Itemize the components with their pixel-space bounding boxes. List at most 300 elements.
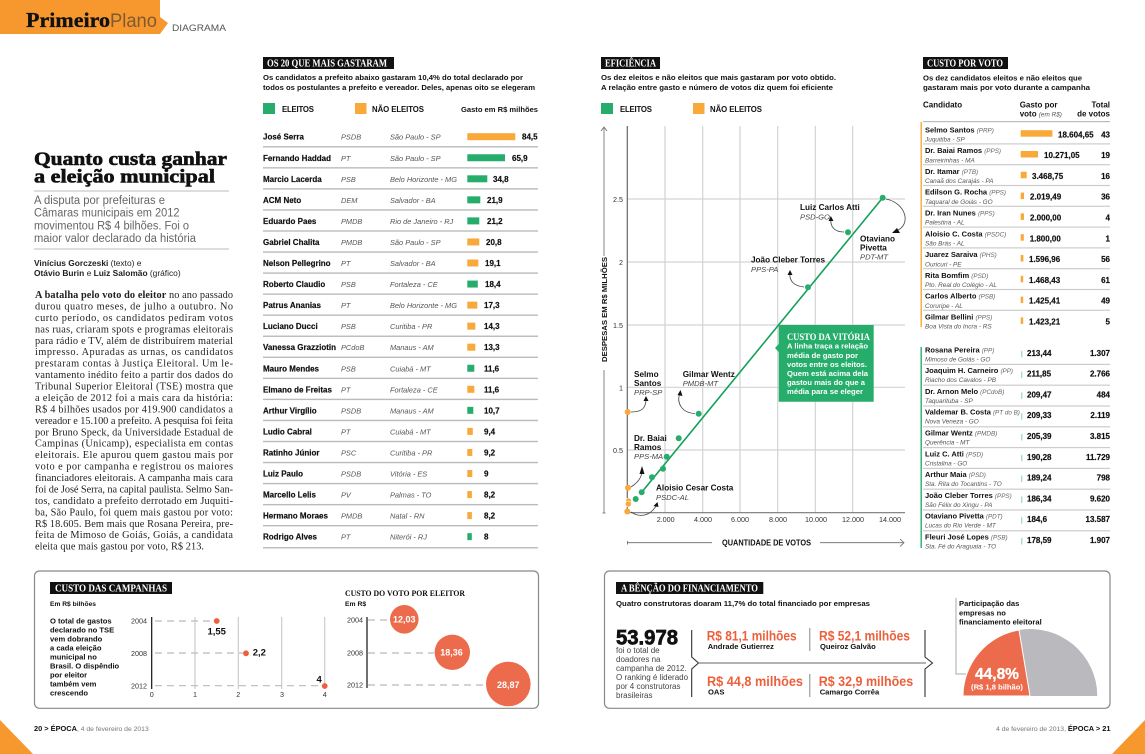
- row: Gilmar Wentz: 3.815: [1090, 432, 1111, 441]
- title: [34, 150, 227, 188]
- deck text: movimentou R$ 4 bilhões. Foi o: [34, 220, 189, 232]
- article body text: por Bruno Speck, da Universidade Estadual de: [35, 427, 233, 438]
- chart: custo do voto por eleitor: 2004: [347, 616, 363, 624]
- chart: total campaign cost: 4: [316, 674, 322, 686]
- row: Fleuri José Lopes: Fleuri José Lopes (PSB): [925, 532, 1008, 542]
- annotation: Luiz Carlos Atti: PSD-GO: [800, 212, 830, 222]
- row: Ratinho Júnior: Curitiba - PR: [390, 448, 433, 457]
- row: Otaviano Pivetta: 13.587: [1086, 515, 1111, 524]
- company: Andrade Gutierrez: R$ 81,1 milhões: [707, 628, 797, 644]
- stat: donors: campanha de 2012.: [616, 664, 687, 673]
- chart: total campaign cost: 1,55: [207, 626, 227, 638]
- annotation: Gilmar Wentz: [678, 370, 735, 414]
- row: Fleuri José Lopes: 1.907: [1090, 536, 1111, 545]
- article body text: eleita que mais gastou por voto, R$ 213.: [35, 542, 204, 553]
- row: Juarez Saraiva: Juarez Saraiva (PHS): [925, 250, 997, 259]
- x axis labels: 6.000: [731, 515, 749, 524]
- row: Nelson Pellegrino: PT: [341, 259, 351, 268]
- scatter chart: [600, 126, 905, 548]
- chart: custo do voto por eleitor: CUSTO DO VOTO POR ELEITOR: [345, 588, 466, 598]
- annotation: Luiz Carlos Atti: [800, 203, 860, 232]
- authors byline: [34, 258, 181, 278]
- article body text: R$ 4 bilhões usados por 419.900 candidatos a: [35, 404, 233, 415]
- row: Dr. Baiai Ramos: 10.271,05: [1044, 151, 1080, 160]
- row: Carlos Alberto: Carlos Alberto (PSB): [925, 292, 995, 301]
- chart: custo do voto por eleitor: Em R$: [345, 601, 366, 608]
- row: Gilmar Wentz: 205,39: [1027, 432, 1052, 441]
- intro text: Os dez eleitos e não eleitos que mais gastaram por voto obtido.: [601, 73, 836, 82]
- row: Nelson Pellegrino: [263, 259, 538, 274]
- row: Gabriel Chalita: 20,8: [486, 238, 502, 247]
- footer right with orange corner: [996, 720, 1145, 754]
- authors byline: Otávio Burin e Luiz Salomão (gráfico): [34, 268, 181, 278]
- group: non-elected table: [920, 122, 1111, 331]
- row: Dr. Arnon Melo: [923, 387, 1111, 407]
- row: Carlos Alberto: [923, 292, 1111, 311]
- row: Luiz Paulo: PSDB: [341, 470, 361, 478]
- label: participação das empresas: financiamento eleitoral: [959, 618, 1042, 626]
- intro text: [263, 73, 535, 92]
- row: Dr. Iran Nunes: Dr. Iran Nunes (PPS): [925, 208, 995, 218]
- row: Arthur Virgílio: 10,7: [484, 406, 500, 415]
- callout: custo da vitória: votos entre os eleitos.: [787, 360, 867, 369]
- row: Eduardo Paes: Eduardo Paes: [263, 217, 317, 226]
- chart: custo do voto por eleitor: [345, 588, 531, 706]
- bracket connector: [692, 630, 698, 697]
- explanatory text: [50, 616, 120, 698]
- row: Selmo Santos: Selmo Santos (PRP): [925, 125, 994, 134]
- title: Quanto custa ganhar: [34, 150, 227, 170]
- row: Gilmar Wentz: [923, 428, 1111, 448]
- row: Roberto Claudio: PSB: [341, 280, 356, 289]
- row: Arthur Virgílio: Arthur Virgílio: [263, 406, 317, 415]
- annotation: Dr. Baiai Ramos: PPS-MA: [634, 452, 663, 461]
- row: Elmano de Freitas: 11,6: [484, 385, 500, 394]
- row: Mauro Mendes: PSB: [341, 364, 356, 373]
- chart: total campaign cost: 0: [150, 690, 154, 699]
- row: ACM Neto: 21,9: [487, 196, 503, 205]
- article body text: Tribunal Superior Eleitoral (TSE) mostra que: [35, 382, 233, 392]
- intro text: [601, 73, 836, 92]
- row: Rodrigo Alves: [263, 533, 538, 548]
- annotation: Otaviano Pivetta: [860, 199, 905, 262]
- annotation: Dr. Baiai Ramos: [631, 434, 667, 487]
- article body text: curto período, os candidatos pediram votos: [35, 313, 233, 324]
- row: Rosana Pereira: Rosana Pereira (PP): [925, 345, 994, 354]
- deck text: Câmaras municipais em 2012: [34, 208, 180, 220]
- row: Eduardo Paes: Rio de Janeiro - RJ: [390, 217, 454, 226]
- row: Ludio Cabral: [263, 427, 538, 442]
- row: Nelson Pellegrino: Nelson Pellegrino: [263, 259, 331, 268]
- chart: total campaign cost: 2: [236, 690, 240, 699]
- row: Edilson G. Rocha: Taquaral de Goiás - GO: [925, 199, 993, 206]
- row: Rodrigo Alves: Niterói - RJ: [390, 533, 427, 542]
- row: Elmano de Freitas: Elmano de Freitas: [263, 385, 332, 394]
- row: Patrus Ananias: [263, 301, 538, 316]
- label: participação das empresas: Participação das: [959, 599, 1019, 608]
- row: ACM Neto: DEM: [341, 196, 358, 205]
- explanatory text: Brasil. O dispêndio: [50, 662, 120, 670]
- row: Mauro Mendes: Mauro Mendes: [263, 364, 320, 373]
- chart: custo do voto por eleitor: 12,03: [393, 614, 416, 624]
- deck text: [34, 190, 229, 250]
- row: Eduardo Paes: PMDB: [341, 217, 362, 226]
- x axis labels: 4.000: [694, 515, 712, 524]
- row: Rita Bomfim: [923, 271, 1111, 290]
- row: Patrus Ananias: 17,3: [484, 301, 500, 310]
- row: Roberto Claudio: 18,4: [485, 280, 501, 289]
- chart: total campaign cost: 2,2: [253, 648, 266, 658]
- row: Aloisio C. Costa: [923, 229, 1111, 248]
- row: ACM Neto: Salvador - BA: [390, 196, 436, 205]
- annotation: João Cleber Torres: [751, 256, 825, 287]
- article body text: vantamento inédito feito a partir dos dados do: [35, 370, 233, 381]
- legend: NÃO ELEITOS: [372, 105, 424, 114]
- row: Juarez Saraiva: [923, 250, 1111, 269]
- x axis labels: 12.000: [842, 515, 864, 524]
- row: Rosana Pereira: 1.307: [1090, 349, 1111, 358]
- row: João Cleber Torres: São Félix do Xingu - PA: [925, 502, 992, 509]
- chart: total campaign cost: 2008: [131, 649, 147, 658]
- annotation: Gilmar Wentz: Gilmar Wentz: [683, 370, 735, 379]
- row: Selmo Santos: 43: [1101, 130, 1111, 139]
- column headers: de votos: [1077, 110, 1111, 118]
- row: Roberto Claudio: Roberto Claudio: [263, 280, 325, 289]
- article body text: financiadores eleitorais. A campanha mais cara: [35, 473, 233, 484]
- stat: donors: [616, 626, 689, 700]
- row: Dr. Arnon Melo: Taquarituba - SP: [925, 398, 973, 405]
- explanatory text: a cada eleição: [50, 644, 102, 652]
- row: Aloisio C. Costa: 1.800,00: [1030, 234, 1061, 243]
- chart: custo do voto por eleitor: 2012: [347, 680, 363, 690]
- row: João Cleber Torres: [923, 491, 1111, 511]
- article body text: nas ruas, criaram spots e programas eleitorais: [35, 324, 233, 335]
- row: Eduardo Paes: [263, 217, 538, 232]
- row: Carlos Alberto: 49: [1101, 297, 1111, 306]
- row: Luiz C. Atti: Luiz C. Atti (PSD): [925, 449, 983, 458]
- row: Ludio Cabral: 9,4: [484, 427, 496, 436]
- legend: [263, 103, 538, 114]
- heading tag: CUSTO DAS CAMPANHAS: [55, 584, 167, 594]
- row: Dr. Baiai Ramos: [923, 146, 1111, 165]
- row: Ludio Cabral: PT: [341, 427, 351, 436]
- y axis labels: 1.5: [613, 321, 623, 330]
- chart: custo do voto por eleitor: 28,87: [497, 680, 520, 690]
- intro text: Quatro construtoras doaram 11,7% do total financiado por empresas: [616, 599, 870, 608]
- row: José Serra: [263, 133, 538, 148]
- row: Gilmar Bellini: [925, 312, 1111, 331]
- row: Roberto Claudio: Fortaleza - CE: [390, 280, 438, 289]
- annotation: Selmo Santos: [631, 370, 663, 412]
- row: Fernando Haddad: 65,9: [512, 154, 528, 163]
- annotation: João Cleber Torres: PPS-PA: [751, 265, 778, 274]
- row: João Cleber Torres: 186,34: [1027, 494, 1052, 503]
- row: Gilmar Bellini: Gilmar Bellini (PPS): [925, 312, 992, 322]
- legend: ELEITOS: [620, 105, 652, 114]
- company: Andrade Gutierrez: [707, 628, 797, 651]
- y axis labels: 2: [619, 258, 623, 267]
- explanatory text: vem dobrando: [50, 634, 103, 644]
- elected points: [633, 195, 886, 502]
- article body text: [35, 290, 234, 553]
- row: Rosana Pereira: [923, 345, 1111, 365]
- x axis labels: 2.000: [657, 515, 675, 524]
- article body text: impresso. Apuradas as urnas, os candidatos: [35, 347, 233, 358]
- heading tag: CUSTO POR VOTO: [927, 58, 1003, 70]
- row: Dr. Itamar: 16: [1101, 172, 1111, 181]
- column headers: Gasto por: [1020, 100, 1057, 110]
- row: Vanessa Grazziotin: [263, 343, 538, 358]
- row: Dr. Iran Nunes: 2.000,00: [1030, 214, 1062, 222]
- heading tag: EFICIÊNCIA: [605, 58, 657, 70]
- footer right with orange corner: 4 de fevereiro de 2013, ÉPOCA > 21: [996, 724, 1110, 733]
- x axis labels: [657, 515, 901, 524]
- row: Dr. Itamar: 3.468,75: [1032, 172, 1064, 181]
- annotation: Selmo Santos: Selmo: [634, 370, 659, 379]
- callout: custo da vitória: média de gasto por: [787, 351, 858, 360]
- row: Dr. Arnon Melo: 209,47: [1027, 390, 1052, 399]
- intro text: Os candidatos a prefeito abaixo gastaram 10,4% do total declarado por: [263, 73, 523, 82]
- row: Otaviano Pivetta: [923, 512, 1111, 531]
- row: Joaquim H. Carneiro: [923, 366, 1111, 386]
- intro text: todos os postulantes a prefeito e vereador. Deles, apenas oito se elegeram: [263, 83, 535, 92]
- row: Patrus Ananias: Belo Horizonte - MG: [390, 301, 457, 310]
- callout: custo da vitória: Quem está acima dela: [787, 369, 869, 378]
- article body text: prestaram contas à Justiça Eleitoral. Um le-: [35, 359, 234, 370]
- row: Rita Bomfim: 1.468,43: [1029, 276, 1061, 285]
- row: Rita Bomfim: Pto. Real do Colégio - AL: [925, 282, 997, 289]
- row: Vanessa Grazziotin: Manaus - AM: [390, 343, 435, 352]
- row: Otaviano Pivetta: 184,6: [1027, 515, 1048, 524]
- row: Arthur Virgílio: [263, 406, 538, 421]
- stat: donors: 53.978: [616, 626, 678, 650]
- annotation: Luiz Carlos Atti: Luiz Carlos Atti: [800, 203, 860, 212]
- row: Dr. Arnon Melo: 484: [1097, 390, 1111, 399]
- row: Dr. Baiai Ramos: Dr. Baiai Ramos (PPS): [925, 146, 1001, 155]
- label: participação das empresas: [956, 598, 1042, 674]
- intro text: A relação entre gasto e número de votos diz quem foi eficiente: [601, 83, 833, 92]
- column headers: voto (em R$): [1020, 110, 1062, 118]
- company: Camargo Corrêa: R$ 32,9 milhões: [819, 674, 913, 689]
- row: Dr. Arnon Melo: Dr. Arnon Melo (PCdoB): [925, 387, 1004, 396]
- company: OAS: [707, 674, 803, 696]
- row: Aloisio C. Costa: São Brás - AL: [925, 241, 965, 248]
- header: Primeiro Plano section tab: Plano: [110, 11, 157, 32]
- annotation: Aloisio Cesar Costa: Aloisio Cesar Costa: [656, 484, 734, 492]
- row: Dr. Iran Nunes: [923, 208, 1111, 228]
- row: Arthur Maia: Arthur Maia (PSD): [925, 470, 986, 479]
- row: José Serra: PSDB: [341, 133, 361, 142]
- row: Marcio Lacerda: Belo Horizonte - MG: [390, 175, 457, 184]
- row: Mauro Mendes: 11,6: [484, 364, 500, 373]
- row: Arthur Maia: Sta. Rita do Tocantins - TO: [925, 481, 1002, 488]
- row: Gilmar Wentz: Gilmar Wentz (PMDB): [925, 428, 997, 438]
- row: Otaviano Pivetta: Lucas do Rio Verde - MT: [925, 523, 997, 530]
- row: Marcio Lacerda: PSB: [341, 175, 356, 184]
- row: Dr. Iran Nunes: Palestina - AL: [925, 220, 965, 227]
- row: Dr. Itamar: Canaã dos Carajás - PA: [925, 178, 993, 185]
- row: Selmo Santos: Juquitiba - SP: [924, 137, 966, 144]
- row: Vanessa Grazziotin: 13,3: [484, 343, 500, 352]
- x axis title and arrow: [627, 538, 904, 548]
- authors byline: Vinícius Gorczeski (texto) e: [34, 258, 142, 268]
- chart: total campaign cost: 4: [323, 690, 327, 699]
- stat: donors: foi o total de: [616, 646, 660, 655]
- row: Mauro Mendes: Cuiabá - MT: [390, 364, 431, 373]
- bracket connector right: [925, 630, 932, 697]
- deck text: maior valor declarado da história: [34, 233, 197, 245]
- row: Luiz Paulo: Vitória - ES: [390, 470, 427, 478]
- row: Elmano de Freitas: Fortaleza - CE: [390, 385, 438, 394]
- row: Juarez Saraiva: Ouricuri - PE: [925, 261, 962, 268]
- article body text: ba, São Paulo, foi quem mais gastou por voto:: [35, 507, 233, 518]
- callout: custo da vitória: CUSTO DA VITÓRIA: [787, 331, 870, 343]
- legend: Gasto em R$ milhões: [461, 105, 538, 114]
- row: Vanessa Grazziotin: PCdoB: [341, 343, 364, 352]
- row: Elmano de Freitas: [263, 385, 538, 400]
- row: Edilson G. Rocha: 36: [1101, 193, 1111, 202]
- article body text: A batalha pelo voto do eleitor no ano passado: [35, 290, 233, 301]
- annotation: Otaviano Pivetta: Otaviano: [860, 234, 895, 244]
- article body text: feita de Mimoso de Goiás, Goiás, a candidata: [35, 530, 233, 541]
- row: Edilson G. Rocha: Edilson G. Rocha (PPS): [925, 188, 1006, 197]
- y axis labels: 2.5: [613, 195, 623, 204]
- row: Marcio Lacerda: Marcio Lacerda: [263, 175, 322, 184]
- row: Luiz Paulo: Luiz Paulo: [263, 470, 303, 478]
- row: Valdemar B. Costa: 209,33: [1027, 411, 1052, 420]
- article body text: voto e por campanha e registrou os maiores: [35, 462, 233, 473]
- row: José Serra: 84,5: [522, 133, 538, 142]
- row: Luiz Paulo: [263, 470, 538, 484]
- row: Valdemar B. Costa: Valdemar B. Costa (PT do B): [925, 408, 1020, 417]
- chart: total campaign cost: 2012: [131, 682, 147, 690]
- annotation: Otaviano Pivetta: Pivetta: [860, 244, 887, 252]
- y axis labels: 1: [619, 384, 623, 392]
- y axis title and arrow: DESPESAS EM R$ MILHÕES: [600, 257, 609, 362]
- company: Camargo Corrêa: [819, 674, 913, 696]
- row: Rosana Pereira: 213,44: [1027, 349, 1052, 358]
- label: participação das empresas: empresas no: [959, 608, 1006, 618]
- row: Ratinho Júnior: [263, 448, 538, 463]
- chart: custo do voto por eleitor: 2008: [347, 648, 363, 658]
- company: OAS: R$ 44,8 milhões: [707, 674, 803, 689]
- row: Juarez Saraiva: 56: [1101, 255, 1111, 264]
- row: Ratinho Júnior: 9,2: [484, 448, 496, 457]
- row: Marcello Lelis: Palmas - TO: [390, 491, 432, 500]
- row: Rita Bomfim: Rita Bomfim (PSD): [925, 271, 988, 280]
- row: Rita Bomfim: 61: [1101, 276, 1111, 285]
- annotation: Otaviano Pivetta: PDT-MT: [860, 252, 889, 262]
- row: Luciano Ducci: Luciano Ducci: [263, 322, 318, 331]
- row: Patrus Ananias: PT: [341, 301, 351, 310]
- legend: [601, 103, 762, 114]
- row: Marcello Lelis: [263, 491, 538, 505]
- row: Fernando Haddad: PT: [341, 154, 351, 163]
- row: Juarez Saraiva: 1.596,96: [1029, 255, 1061, 264]
- row: Dr. Baiai Ramos: 19: [1101, 151, 1111, 160]
- article body text: foi de José Serra, na capital paulista. Selmo San-: [35, 484, 234, 496]
- row: Rosana Pereira: Mimoso de Goiás - GO: [925, 356, 990, 363]
- non-elected points: [624, 409, 632, 514]
- deck text: A disputa por prefeituras e: [34, 195, 165, 207]
- article body text: Campinas (Unicamp), especialista em contas: [35, 439, 233, 450]
- row: Fernando Haddad: São Paulo - SP: [390, 154, 441, 163]
- annotation: Dr. Baiai Ramos: Ramos: [634, 443, 662, 452]
- row: Ludio Cabral: Ludio Cabral: [263, 427, 312, 436]
- row: Valdemar B. Costa: [923, 408, 1111, 427]
- row: Gilmar Bellini: Boa Vista do Incra - RS: [925, 324, 992, 331]
- row: Joaquim H. Carneiro: Riacho dos Cavalos - PB: [925, 377, 997, 384]
- column headers: Candidato: [923, 100, 962, 110]
- row: Luiz C. Atti: 11.729: [1086, 453, 1111, 462]
- column headers: Total: [1091, 100, 1110, 110]
- row: João Cleber Torres: 9.620: [1090, 494, 1111, 503]
- intro text: Os dez candidatos eleitos e não eleitos que: [923, 74, 1082, 82]
- row: Arthur Maia: [923, 470, 1111, 490]
- explanatory text: crescendo: [50, 688, 88, 698]
- y axis labels: [613, 195, 623, 455]
- row: Dr. Itamar: [923, 167, 1111, 186]
- row: Hermano Moraes: PMDB: [341, 512, 362, 521]
- pie chart: 44,8% share: [963, 629, 1097, 696]
- article body text: eleitorais. Ele apurou quem gastou mais por: [35, 450, 234, 461]
- row: Arthur Maia: 798: [1097, 474, 1111, 483]
- callout: custo da vitória: média para se eleger: [787, 387, 863, 396]
- annotation: Aloisio Cesar Costa: [631, 484, 734, 515]
- row: Dr. Baiai Ramos: Barreirinhas - MA: [925, 157, 975, 164]
- row: Gabriel Chalita: PMDB: [341, 238, 362, 247]
- stat: donors: brasileiras: [616, 691, 652, 700]
- article body text: a eleição de 2012 foi a mais cara da história:: [35, 393, 233, 404]
- row: Rodrigo Alves: 8: [484, 533, 489, 542]
- row: Valdemar B. Costa: Nova Veneza - GO: [925, 419, 979, 426]
- row: José Serra: José Serra: [263, 133, 304, 142]
- row: Luiz Paulo: 9: [484, 470, 489, 478]
- row: Roberto Claudio: [263, 280, 538, 295]
- annotation: Gilmar Wentz: PMDB-MT: [683, 379, 719, 388]
- callout: custo da vitória: A linha traça a relação: [787, 342, 868, 351]
- row: Selmo Santos: 18.604,65: [1058, 130, 1094, 139]
- row: Rodrigo Alves: Rodrigo Alves: [263, 533, 317, 542]
- annotation: Selmo Santos: PRP-SP: [634, 388, 663, 397]
- article body text: R$ 18.605. Bem mais que Rosana Pereira, pre-: [35, 519, 234, 530]
- row: Valdemar B. Costa: 2.119: [1090, 411, 1111, 420]
- article body text: durou quatro meses, de julho a outubro. No: [35, 301, 233, 312]
- row: Edilson G. Rocha: 2.019,49: [1030, 193, 1062, 202]
- callout: custo da vitória: gastou mais do que a: [787, 378, 866, 387]
- row: Joaquim H. Carneiro: 211,85: [1027, 370, 1052, 379]
- x axis title and arrow: QUANTIDADE DE VOTOS: [722, 538, 811, 548]
- row: Gabriel Chalita: São Paulo - SP: [390, 238, 441, 247]
- row: Nelson Pellegrino: 19,1: [485, 259, 501, 268]
- stat: donors: doadores na: [616, 655, 661, 664]
- pie chart: 44,8% share: 44,8%: [975, 666, 1019, 683]
- chart: total campaign cost: 2004: [131, 616, 147, 626]
- annotation: Dr. Baiai Ramos: Dr. Baiai: [634, 434, 667, 443]
- row: João Cleber Torres: João Cleber Torres (PPS): [925, 491, 1012, 500]
- row: Gilmar Bellini: 1.423,21: [1029, 318, 1061, 326]
- x axis labels: 14.000: [879, 515, 901, 524]
- row: ACM Neto: ACM Neto: [263, 196, 301, 205]
- row: Arthur Maia: 189,24: [1027, 474, 1052, 483]
- footer left with orange corner: [0, 720, 149, 754]
- row: Luiz C. Atti: [923, 449, 1111, 469]
- explanatory text: por eleitor: [50, 670, 87, 680]
- row: Aloisio C. Costa: Aloisio C. Costa (PSDC): [925, 229, 1006, 238]
- row: Gilmar Bellini: 5: [1106, 318, 1111, 326]
- chart: total campaign cost: 1: [193, 690, 197, 699]
- company: Andrade Gutierrez: Andrade Gutierrez: [708, 642, 774, 651]
